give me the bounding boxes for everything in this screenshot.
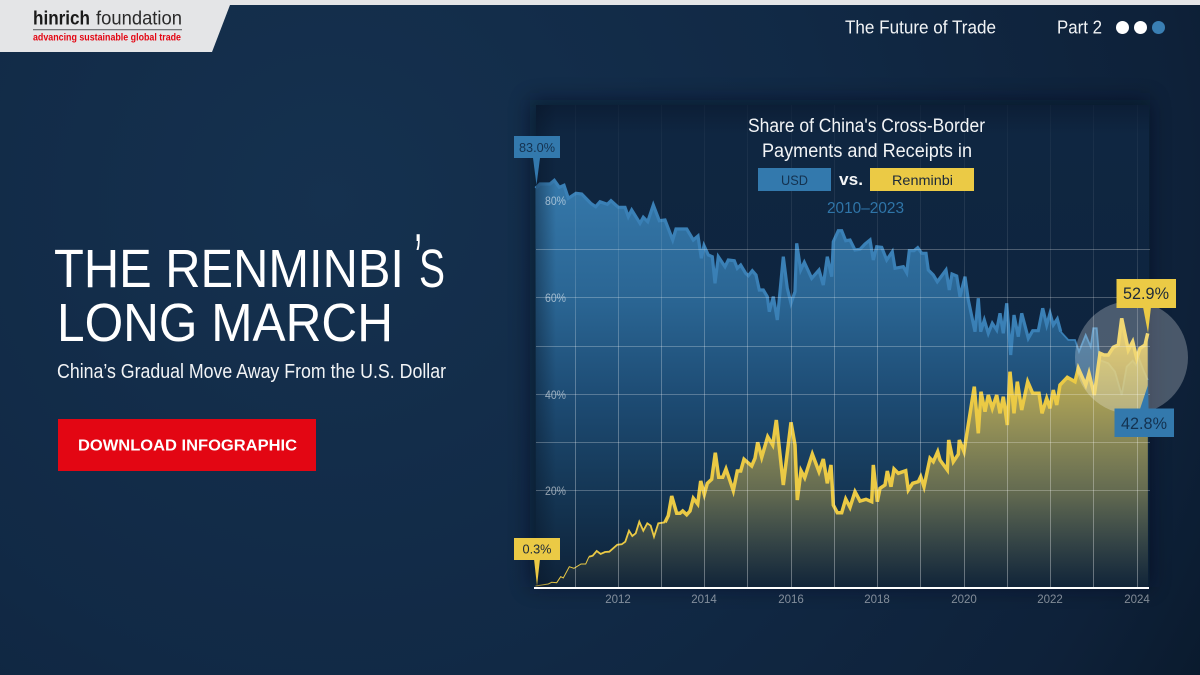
callout: Renminbi start 0.3%: 0.3%	[522, 542, 552, 556]
logo: hinrich foundation: foundation	[96, 8, 182, 30]
logo: hinrich foundation: hinrich	[33, 8, 90, 30]
callout: Renminbi end 52.9%: 52.9%	[1123, 285, 1169, 303]
y axis labels: 60%	[545, 293, 566, 305]
x axis labels: 2018	[864, 594, 890, 606]
title: LONG MARCH	[57, 293, 393, 353]
legend: vs: vs.	[839, 170, 863, 189]
header: part indicator: Part 2	[1057, 16, 1102, 38]
legend: Renminbi: Renminbi	[892, 172, 953, 188]
chart title: Payments and Receipts in	[762, 141, 972, 162]
callout: USD end 42.8%	[1114, 385, 1174, 437]
area chart: Renminbi share	[536, 318, 1148, 587]
x axis labels: 2022	[1037, 594, 1063, 606]
x axis labels: 2014	[691, 594, 717, 606]
x axis labels: 2020	[951, 594, 977, 606]
title: THE RENMINBI	[54, 239, 404, 299]
callout: Renminbi end 52.9%	[1116, 279, 1176, 333]
y axis labels: 80%	[545, 196, 566, 208]
area chart: USD share	[536, 180, 1148, 587]
header: part indicator	[1057, 16, 1165, 38]
subtitle: China’s Gradual Move Away From the U.S. Dollar	[57, 361, 446, 383]
button: download infographic: DOWNLOAD INFOGRAPHIC	[78, 438, 297, 454]
chart title	[748, 116, 986, 162]
legend: Renminbi	[870, 168, 974, 191]
y axis labels: 40%	[545, 390, 566, 402]
legend: USD: USD	[781, 172, 808, 188]
x axis baseline	[534, 587, 1149, 589]
y axis labels: 20%	[545, 486, 566, 498]
title	[54, 220, 445, 353]
highlight circle	[1075, 301, 1188, 414]
y axis labels	[545, 196, 566, 498]
x axis labels: 2024	[1124, 594, 1150, 606]
button: download infographic	[58, 419, 316, 471]
callout: USD end 42.8%: 42.8%	[1121, 415, 1167, 433]
logo: hinrich foundation: advancing sustainable global trade	[33, 32, 181, 44]
panel: chart	[530, 100, 1150, 606]
top light bar	[0, 0, 1200, 5]
date range: 2010–2023	[827, 200, 904, 217]
callout: USD start 83.0%	[514, 136, 560, 185]
callout: USD start 83.0%: 83.0%	[519, 140, 555, 155]
x axis labels: 2012	[605, 594, 631, 606]
chart title: Share of China's Cross-Border	[748, 116, 986, 137]
logo: hinrich foundation	[0, 0, 231, 52]
x axis labels	[605, 594, 1150, 606]
title: S	[419, 239, 445, 299]
title: ’	[414, 220, 422, 298]
callout: Renminbi start 0.3%	[514, 538, 560, 586]
legend: USD	[758, 168, 831, 191]
x axis labels: 2016	[778, 594, 804, 606]
header: series name: The Future of Trade	[845, 16, 996, 38]
